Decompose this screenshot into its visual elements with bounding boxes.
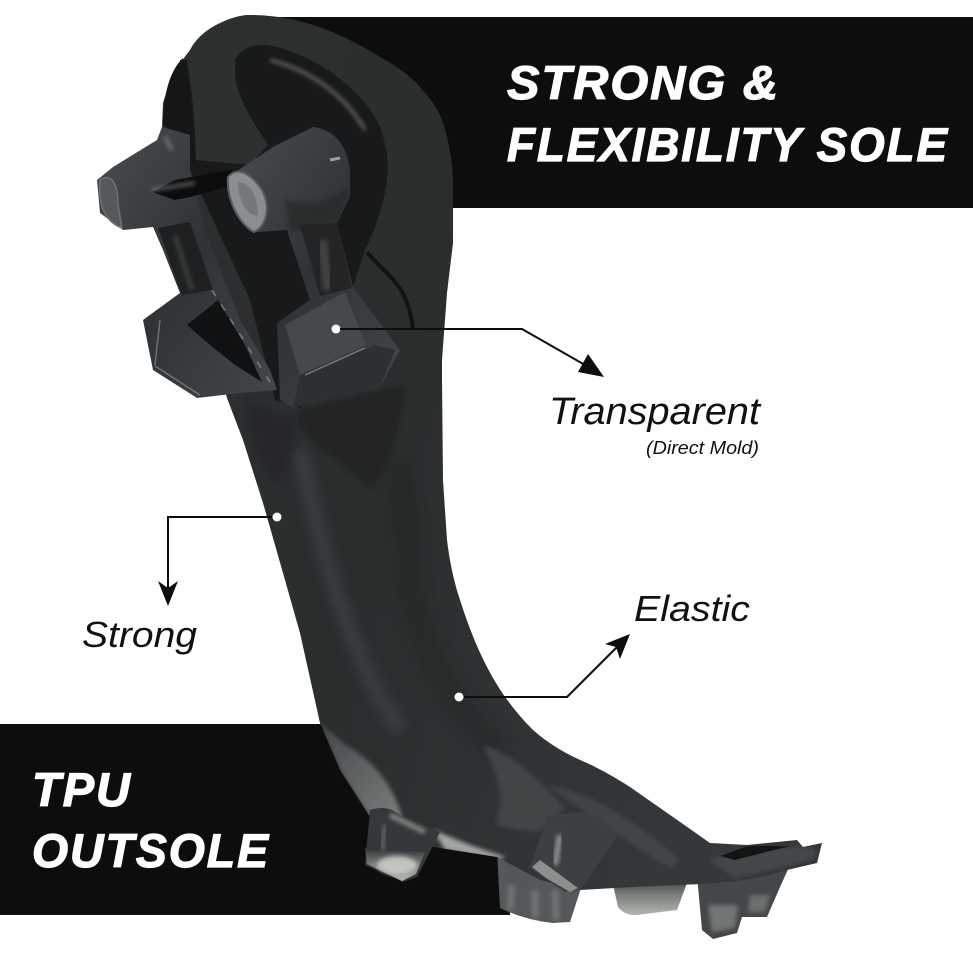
heel pocket <box>180 45 395 408</box>
heading: strong and flexibility sole: STRONG & <box>507 56 780 109</box>
sole body <box>162 15 822 890</box>
heading: strong and flexibility sole <box>507 56 949 171</box>
heel arch highlight <box>270 60 365 130</box>
heel stud left <box>97 127 277 398</box>
outsole illustration <box>97 15 822 939</box>
callout: transparent <box>332 324 762 458</box>
rear forefoot clear studs <box>365 808 618 892</box>
heading: strong and flexibility sole: FLEXIBILITY SOLE <box>507 118 949 171</box>
heel stud left details <box>100 137 275 395</box>
callout: transparent: (Direct Mold) <box>646 438 759 458</box>
heel left glossy dome <box>163 58 195 165</box>
forefoot studs <box>497 850 790 939</box>
heel side groove <box>367 252 413 330</box>
banner: top black <box>270 17 973 208</box>
sole shading <box>245 385 816 878</box>
heel surface <box>187 15 268 165</box>
callout: strong: Strong <box>82 614 197 655</box>
callout: elastic <box>454 588 750 702</box>
heading: tpu outsole: TPU <box>32 763 132 816</box>
heel stud right details <box>228 158 395 408</box>
heading: tpu outsole <box>32 763 270 877</box>
heading: tpu outsole: OUTSOLE <box>32 824 270 877</box>
callout: elastic: Elastic <box>634 588 750 629</box>
callout: strong <box>82 512 282 655</box>
callout: transparent: Transparent <box>549 391 762 433</box>
heel stud right <box>228 127 400 408</box>
banner: bottom black <box>0 724 510 915</box>
